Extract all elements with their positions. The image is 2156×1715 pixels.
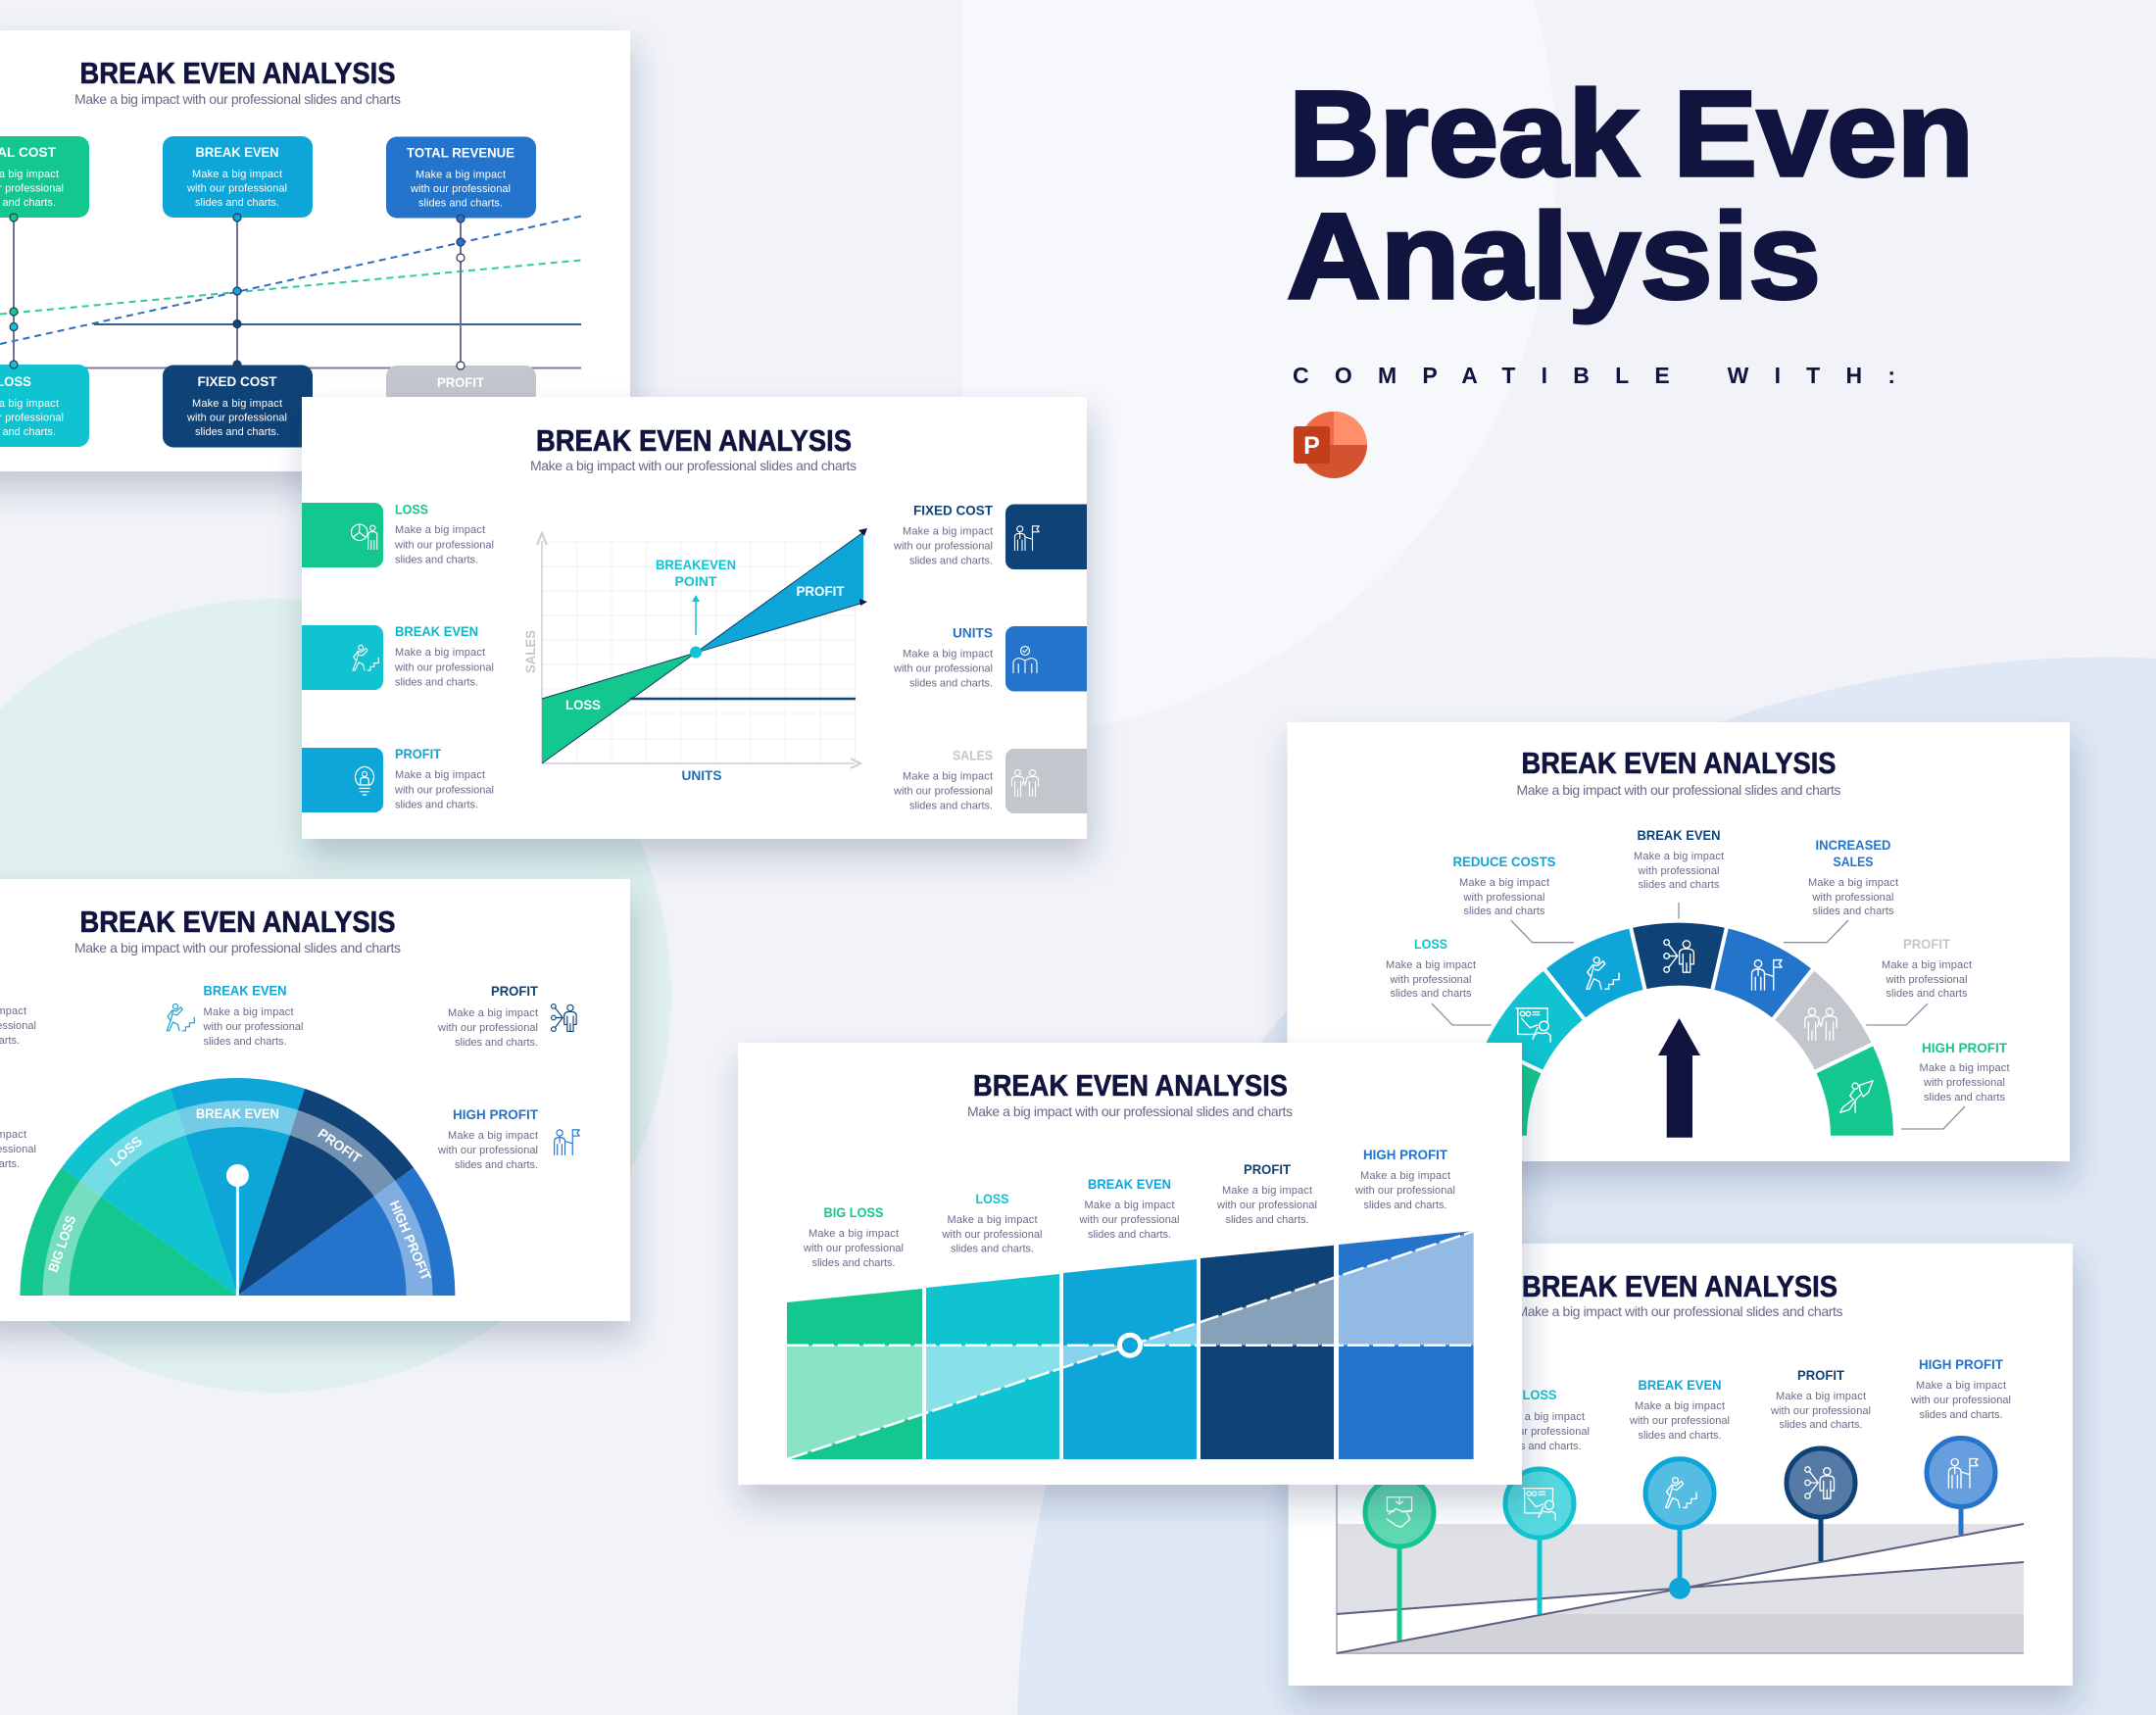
chart: semicircle sectors <box>20 1078 455 1297</box>
text: loss: LOSS <box>976 1191 1009 1206</box>
background: light circle <box>404 0 1556 738</box>
icon: PowerPoint logo: P <box>1303 432 1320 460</box>
icon: network person <box>552 1004 576 1031</box>
panel: break even lines with callout boxes <box>0 30 630 471</box>
text: loss: slides and charts. <box>1497 1441 1582 1452</box>
text: reduce costs: with professional <box>1462 892 1544 904</box>
text: units: slides and charts. <box>909 678 993 690</box>
panel background <box>738 1043 1522 1485</box>
heading: BREAK EVEN ANALYSIS <box>80 905 396 939</box>
text: increased sales: SALES <box>1833 854 1874 869</box>
icon: light bulb <box>356 766 373 795</box>
text: break even <box>1629 1377 1730 1442</box>
pin: profit <box>1787 1448 1855 1561</box>
text: high profit: with our professional <box>1910 1395 2011 1406</box>
text: high profit <box>437 1106 538 1171</box>
text: high profit: slides and charts. <box>455 1159 538 1171</box>
text: break even: Make a big impact <box>395 647 485 659</box>
text: break even <box>202 982 304 1048</box>
background: blue shape <box>1017 658 2156 1715</box>
heading: BREAK EVEN ANALYSIS <box>1521 746 1837 780</box>
text: sales <box>893 747 993 811</box>
panel: pins on break even lines <box>1288 1244 2073 1686</box>
text: profit: PROFIT <box>1244 1161 1291 1177</box>
panel: five column bars <box>738 1043 1522 1485</box>
icon: rocket person <box>1840 1081 1873 1112</box>
tab: units <box>1005 626 1087 692</box>
arrow <box>1658 1018 1700 1138</box>
text: increased sales: with professional <box>1811 892 1893 904</box>
box: total revenue: with our professional <box>410 183 511 195</box>
chart markers <box>10 214 465 369</box>
text: profit: Make a big impact <box>448 1007 538 1019</box>
text: profit: slides and charts. <box>395 800 478 811</box>
text: high profit: with our professional <box>437 1145 538 1156</box>
chart: semicircle sectors: LOSS <box>107 1133 145 1169</box>
pin: big loss <box>1365 1478 1434 1641</box>
tab: fixed cost <box>1005 504 1087 569</box>
text: profit: slides and charts. <box>1780 1419 1862 1431</box>
text: profit <box>1882 936 1972 1000</box>
connectors <box>1432 903 1965 1129</box>
chart: break even triangles: UNITS <box>682 767 721 783</box>
text: profit: PROFIT <box>395 746 441 761</box>
text: loss: with our professional <box>941 1229 1043 1241</box>
text: loss: slides and charts. <box>395 555 478 566</box>
text: break even: BREAK EVEN <box>1639 1377 1721 1393</box>
text: sales: Make a big impact <box>903 770 993 782</box>
box: total revenue: slides and charts. <box>418 198 503 210</box>
text: loss: Make a big impact <box>395 524 485 536</box>
subheading: Make a big impact with our professional slides and charts <box>74 91 401 107</box>
box: profit <box>386 366 536 448</box>
text: loss: with professional <box>1390 974 1472 986</box>
text: break even: Make a big impact <box>1634 851 1724 862</box>
background: mint circle <box>0 599 671 1393</box>
text: profit: Make a big impact <box>1776 1391 1866 1402</box>
text: big loss: slides and charts. <box>811 1257 896 1269</box>
text: break even: with our professional <box>394 662 494 674</box>
heading: BREAK EVEN ANALYSIS <box>1522 1269 1838 1303</box>
text: profit: PROFIT <box>1797 1367 1844 1383</box>
text: increased sales <box>1808 837 1898 917</box>
text: break even: with our professional <box>1078 1214 1180 1226</box>
text: big loss: BIG LOSS <box>823 1204 884 1220</box>
text: break even: slides and charts. <box>204 1036 286 1048</box>
text: reduce costs: slides and charts <box>1464 906 1545 917</box>
icon: pie chart person <box>351 524 377 549</box>
text: loss <box>1386 936 1476 1000</box>
text: increased sales: slides and charts <box>1813 906 1894 917</box>
text: profit: Make a big impact <box>1882 959 1972 971</box>
text: high profit: slides and charts <box>1924 1092 2005 1103</box>
box: fixed cost: slides and charts. <box>195 426 279 438</box>
heading: BREAK EVEN ANALYSIS <box>536 423 852 458</box>
text: fixed cost: Make a big impact <box>903 525 993 537</box>
chart: break even triangles <box>522 528 867 783</box>
box: total revenue: Make a big impact <box>416 169 506 180</box>
pin: high profit <box>1927 1439 1995 1535</box>
heading: BREAK EVEN ANALYSIS <box>973 1068 1288 1102</box>
main title: Analysis <box>1287 189 1821 324</box>
subheading: Make a big impact with our professional slides and charts <box>530 458 857 473</box>
chart: break even triangles: POINT <box>674 573 717 589</box>
box: break even: Make a big impact <box>192 169 282 180</box>
text: units: with our professional <box>893 662 993 674</box>
text: profit: PROFIT <box>1903 936 1950 952</box>
chart: semicircle sectors: BREAK EVEN <box>196 1105 279 1121</box>
icon: PowerPoint logo <box>1294 412 1367 478</box>
panel: breakeven chart <box>302 397 1087 839</box>
box: break even <box>163 136 313 218</box>
text: fixed cost <box>893 502 993 566</box>
chart: break even triangles: SALES <box>522 630 538 673</box>
icon: person with flag <box>1752 960 1782 990</box>
text: profit <box>437 983 538 1049</box>
text: high profit <box>1354 1147 1455 1211</box>
text: loss: LOSS <box>1523 1387 1556 1402</box>
icon: network person <box>1664 940 1693 972</box>
text: reduce costs: Make a big impact <box>1459 877 1549 889</box>
text: break even: BREAK EVEN <box>1088 1176 1171 1192</box>
panel background <box>1288 1244 2073 1686</box>
text: profit: with our professional <box>437 1022 538 1034</box>
text: loss: with our professional <box>394 539 494 551</box>
text: break even: slides and charts. <box>1088 1229 1171 1241</box>
icon: climbing person <box>1587 957 1619 989</box>
text: loss: Make a big impact <box>947 1214 1037 1226</box>
main title: Break Even <box>1289 67 1974 202</box>
text: break even <box>1634 827 1724 891</box>
text: break even: with professional <box>1637 865 1719 877</box>
text: high profit: with professional <box>1923 1077 2005 1089</box>
text: high profit: Make a big impact <box>1919 1062 2009 1074</box>
main title <box>1287 67 1974 324</box>
text: fixed cost: FIXED COST <box>913 502 993 517</box>
text: loss <box>0 1129 36 1170</box>
box: fixed cost: FIXED COST <box>198 373 277 389</box>
text: high profit: with our professional <box>1354 1185 1455 1197</box>
text: profit: with our professional <box>1770 1405 1871 1417</box>
box: total revenue: TOTAL REVENUE <box>407 145 514 161</box>
tab: loss <box>302 503 383 567</box>
chart lines <box>0 216 581 368</box>
chart: semicircle sectors: HIGH PROFIT <box>387 1199 435 1283</box>
icon: person with flag <box>1015 526 1039 551</box>
text: break even <box>1078 1176 1180 1241</box>
text: break even: slides and charts <box>1639 879 1720 891</box>
text: high profit <box>1919 1040 2009 1103</box>
panel: arch with seven segments <box>1288 722 2070 1161</box>
text: profit: slides and charts. <box>1225 1214 1309 1226</box>
icon: person with check <box>1013 647 1037 672</box>
text: break even: BREAK EVEN <box>204 982 286 998</box>
icon: person with flag <box>555 1130 579 1154</box>
text: high profit: slides and charts. <box>1919 1409 2003 1421</box>
text: high profit: HIGH PROFIT <box>1922 1040 2007 1055</box>
text: profit <box>394 746 494 811</box>
text: profit: with our professional <box>1216 1200 1317 1211</box>
box: profit: PROFIT <box>437 374 484 390</box>
text: profit <box>1770 1367 1871 1431</box>
text: loss: Make a big impact <box>1386 959 1476 971</box>
text: increased sales: INCREASED <box>1815 837 1891 853</box>
chart: grey bands and lines <box>1337 1470 2024 1653</box>
chart: break even triangles: PROFIT <box>796 583 845 599</box>
text: break even: BREAK EVEN <box>1637 827 1721 843</box>
text: profit: PROFIT <box>491 983 538 999</box>
box: total cost <box>0 136 89 218</box>
text: increased sales: Make a big impact <box>1808 877 1898 889</box>
text: profit <box>1216 1161 1317 1226</box>
panel background <box>302 397 1087 839</box>
box: total revenue <box>386 137 536 218</box>
tab: break even <box>302 625 383 690</box>
text: big loss <box>803 1204 904 1269</box>
text: high profit: HIGH PROFIT <box>1919 1356 2003 1372</box>
text: loss <box>394 502 494 566</box>
panel background <box>0 879 630 1321</box>
compatible with label: COMPATIBLE WITH: <box>1293 363 1895 388</box>
subheading: Make a big impact with our professional slides and charts <box>1517 1303 1842 1319</box>
text: profit: with our professional <box>394 784 494 796</box>
text: high profit: Make a big impact <box>1360 1170 1450 1182</box>
chart: break even triangles: BREAKEVEN <box>656 557 736 572</box>
box: loss <box>0 365 89 447</box>
text: loss <box>1489 1387 1590 1452</box>
tab: profit <box>302 748 383 812</box>
text: break even: Make a big impact <box>204 1006 294 1018</box>
text: loss: LOSS <box>395 502 428 517</box>
text: break even: slides and charts. <box>1639 1430 1721 1442</box>
heading: BREAK EVEN ANALYSIS <box>80 56 396 90</box>
text: break even: with our professional <box>202 1021 304 1033</box>
box: fixed cost: with our professional <box>186 412 287 423</box>
text: profit: slides and charts. <box>455 1037 538 1049</box>
text: loss: slides and charts <box>1390 988 1472 1000</box>
text: high profit: slides and charts. <box>1364 1200 1446 1211</box>
box: break even: BREAK EVEN <box>196 144 278 160</box>
text: high profit: Make a big impact <box>448 1130 538 1142</box>
text: loss: with our professional <box>1489 1426 1590 1438</box>
text: big loss <box>0 1005 36 1047</box>
panel: semicircle gauge <box>0 879 630 1321</box>
text: units: UNITS <box>953 625 993 641</box>
chart: column bars <box>787 1231 1474 1465</box>
icon: climbing person <box>167 1004 194 1031</box>
panel background <box>0 30 630 471</box>
text: profit: slides and charts <box>1886 988 1968 1000</box>
text: big loss: Make a big impact <box>808 1228 899 1240</box>
icon: climbing person <box>353 645 378 670</box>
text: profit: Make a big impact <box>395 769 485 781</box>
text: fixed cost: slides and charts. <box>909 555 993 566</box>
tab: sales <box>1005 749 1087 813</box>
subheading: Make a big impact with our professional slides and charts <box>1517 782 1840 798</box>
box: break even: with our professional <box>186 182 287 194</box>
text: high profit: Make a big impact <box>1916 1380 2006 1392</box>
text: profit: Make a big impact <box>1222 1185 1312 1197</box>
text: loss: Make a big impact <box>1494 1411 1585 1423</box>
text: break even: slides and charts. <box>395 676 478 688</box>
text: reduce costs: REDUCE COSTS <box>1452 854 1556 869</box>
panel background <box>1288 722 2070 1161</box>
text: sales: SALES <box>953 747 993 762</box>
text: high profit: HIGH PROFIT <box>453 1106 538 1122</box>
text: big loss: with our professional <box>803 1243 904 1254</box>
text: reduce costs <box>1452 854 1556 917</box>
text: units: Make a big impact <box>903 649 993 661</box>
text: high profit: HIGH PROFIT <box>1363 1147 1447 1162</box>
text: break even: Make a big impact <box>1635 1400 1725 1412</box>
text: break even: Make a big impact <box>1084 1200 1174 1211</box>
icon: two people <box>1011 770 1039 796</box>
text: units <box>893 625 993 690</box>
pin: break even <box>1645 1459 1714 1599</box>
subheading: Make a big impact with our professional slides and charts <box>74 940 401 956</box>
text: sales: with our professional <box>893 786 993 798</box>
pin: loss <box>1505 1469 1574 1614</box>
text: high profit <box>1910 1356 2011 1421</box>
arch segments <box>1462 921 1895 1138</box>
text: profit: with professional <box>1886 974 1968 986</box>
text: sales: slides and charts. <box>909 800 993 811</box>
chart: semicircle sectors: BIG LOSS <box>45 1213 78 1274</box>
subheading: Make a big impact with our professional slides and charts <box>967 1103 1293 1119</box>
icon: two people <box>1805 1008 1837 1040</box>
chart: break even triangles: LOSS <box>565 697 601 712</box>
text: loss <box>941 1191 1043 1254</box>
text: break even: with our professional <box>1629 1415 1730 1427</box>
text: fixed cost: with our professional <box>893 541 993 553</box>
icon: presentation board <box>1516 1008 1550 1042</box>
text: break even: BREAK EVEN <box>395 623 478 639</box>
box: fixed cost <box>163 365 313 447</box>
box: break even: slides and charts. <box>195 197 279 209</box>
text: loss: slides and charts. <box>951 1243 1034 1254</box>
text: break even <box>394 623 494 688</box>
chart: semicircle sectors: PROFIT <box>316 1125 365 1166</box>
text: loss: LOSS <box>1414 936 1447 952</box>
box: fixed cost: Make a big impact <box>192 398 282 410</box>
